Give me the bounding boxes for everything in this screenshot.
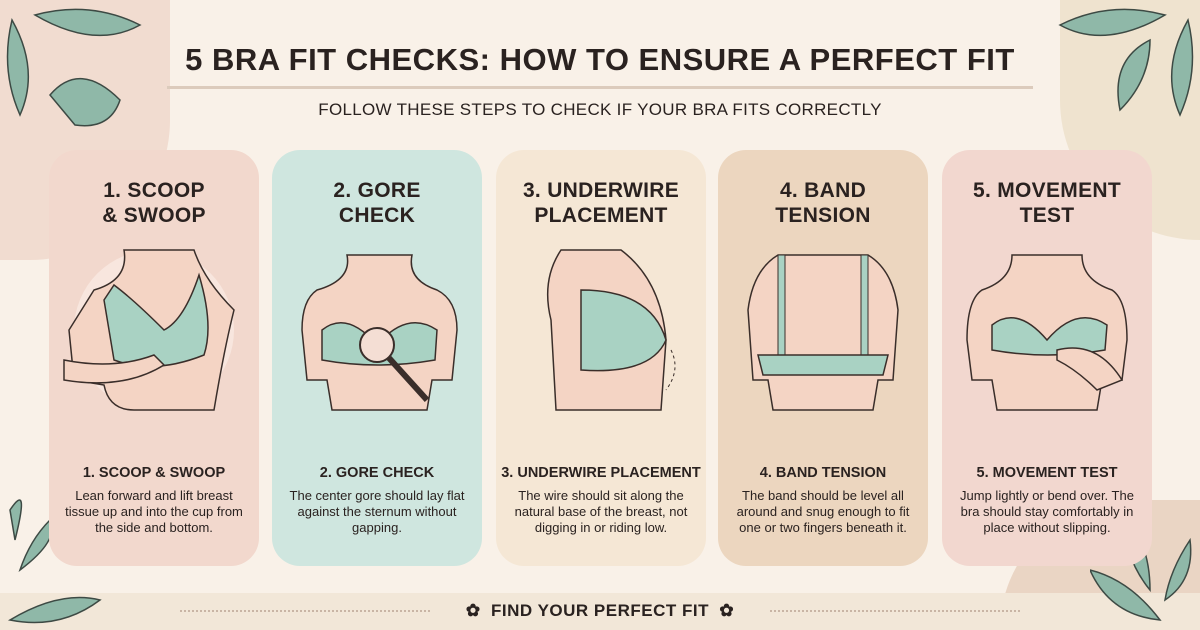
illustration 1 (63, 249, 235, 411)
heading 5 (973, 179, 1121, 227)
heading 3 (523, 179, 679, 227)
heading 2: 2. GORE (333, 179, 421, 202)
text 2: The center gore should lay flat against the sternum without gapping. (290, 488, 464, 535)
decorative leaves top-left (6, 8, 142, 126)
heading 4: TENSION (775, 204, 871, 227)
title: 5 BRA FIT CHECKS: HOW TO ENSURE A PERFECT FIT (185, 42, 1015, 77)
illustration 3 (546, 249, 676, 411)
panel: 4 band tension (718, 150, 928, 566)
illustration 4 (747, 254, 899, 411)
text 3: The wire should sit along the natural base of the breast, not digging in or riding low. (515, 488, 687, 535)
label 4: 4. BAND TENSION (760, 465, 886, 481)
subtitle: FOLLOW THESE STEPS TO CHECK IF YOUR BRA FITS CORRECTLY (318, 100, 882, 119)
footer: find your perfect fit: ✿ FIND YOUR PERFECT FIT ✿ (466, 601, 734, 620)
illustration 5 (966, 254, 1128, 411)
text 1: Lean forward and lift breast tissue up and into the cup from the side and bottom. (65, 488, 243, 535)
label 5: 5. MOVEMENT TEST (976, 465, 1118, 481)
heading 1 (102, 179, 206, 227)
heading 5: TEST (1020, 204, 1074, 227)
decorative leaves bottom-left (8, 499, 102, 624)
heading 1: 1. SCOOP (103, 179, 205, 202)
heading 3: PLACEMENT (534, 204, 668, 227)
panel: 5 movement test (942, 150, 1152, 566)
background blob right (1060, 0, 1200, 240)
heading 3: 3. UNDERWIRE (523, 179, 679, 202)
heading 1: & SWOOP (102, 204, 206, 227)
background blob bottom-right (1000, 500, 1200, 630)
illustration 2 (301, 254, 458, 411)
panel: 3 underwire placement (496, 150, 706, 566)
heading 2 (333, 179, 421, 227)
heading 4: 4. BAND (780, 179, 866, 202)
panel: 2 gore check (272, 150, 482, 566)
text 4: The band should be level all around and snug enough to fit one or two fingers beneath it. (737, 488, 909, 535)
panel: 1 scoop & swoop (49, 150, 259, 566)
decorative leaves top-right (1058, 8, 1194, 117)
heading 4 (775, 179, 871, 227)
decorative leaves bottom-right (1090, 538, 1192, 621)
heading 2: CHECK (339, 204, 415, 227)
label 3: 3. UNDERWIRE PLACEMENT (501, 465, 701, 481)
text 5: Jump lightly or bend over. The bra should stay comfortably in place without slipping. (960, 488, 1134, 535)
label 1: 1. SCOOP & SWOOP (83, 465, 225, 481)
label 2: 2. GORE CHECK (320, 465, 434, 481)
footer band (0, 593, 1200, 630)
heading 5: 5. MOVEMENT (973, 179, 1121, 202)
background blob left (0, 0, 170, 260)
